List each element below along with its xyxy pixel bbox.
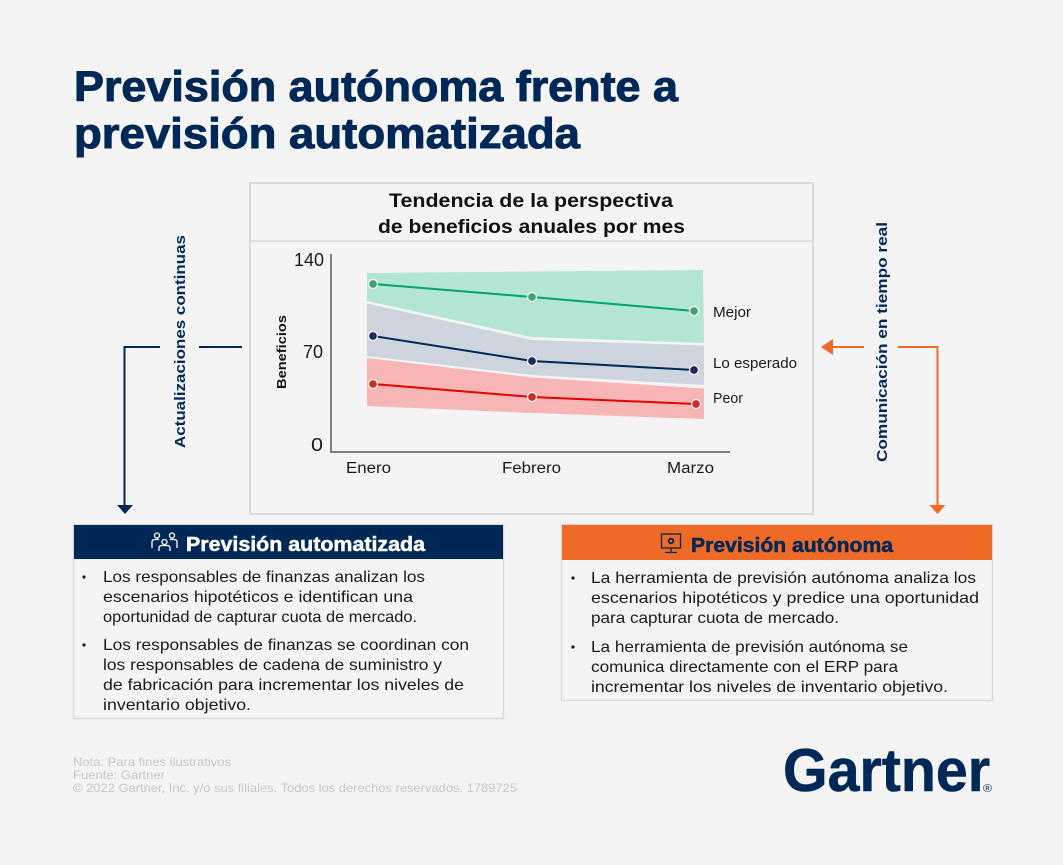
footer notes: Fuente: Gartner [73, 768, 165, 782]
icon: people [152, 533, 177, 551]
title: previsión automatizada [74, 110, 581, 158]
label: continuous updates: Actualizaciones continuas [172, 235, 189, 448]
x axis labels [346, 460, 714, 477]
panel: autonomous forecasting [562, 524, 992, 700]
label: real-time communication: Comunicación en tiempo real [874, 222, 891, 462]
bullets [571, 570, 979, 696]
y axis labels: 0 [311, 435, 323, 455]
header text: Previsión autónoma [691, 535, 894, 557]
band: mejor [367, 270, 704, 343]
footer notes [73, 755, 517, 795]
bullets: oportunidad de capturar cuota de mercado. [103, 609, 417, 626]
series labels: Lo esperado [713, 356, 797, 372]
x axis labels: Febrero [502, 460, 561, 477]
x axis labels: Enero [346, 460, 391, 477]
line: mejor [368, 280, 698, 316]
band: peor [367, 358, 704, 419]
series labels: Peor [713, 391, 743, 407]
y axis labels [294, 250, 324, 455]
arrow: real-time communication [821, 339, 946, 514]
icon: monitor with gear [662, 534, 680, 552]
bullets: los responsables de cadena de suministro y [103, 657, 442, 674]
arrow: continuous updates [117, 347, 242, 514]
chart heading [378, 191, 685, 238]
x axis labels: Marzo [667, 460, 714, 477]
y axis labels: 140 [294, 250, 324, 270]
series labels: Mejor [713, 305, 751, 321]
y axis title: Beneficios [274, 315, 289, 389]
header bar [74, 525, 503, 559]
footer notes: © 2022 Gartner, Inc. y/o sus filiales. Todos los derechos reservados. 1789725 [73, 781, 517, 795]
bullets: para capturar cuota de mercado. [591, 610, 839, 627]
title: Previsión autónoma frente a [74, 63, 679, 111]
bullets: inventario objetivo. [103, 697, 251, 714]
axes [331, 254, 730, 452]
bullets: La herramienta de previsión autónoma se [591, 639, 908, 656]
logo: Gartner: ® [983, 783, 992, 795]
bullets: incrementar los niveles de inventario objetivo. [591, 679, 948, 696]
footer notes: Nota: Para fines ilustrativos [73, 755, 231, 769]
bullets: escenarios hipotéticos e identifican una [103, 589, 413, 606]
bullets: Los responsables de finanzas se coordinan con [103, 637, 469, 654]
bullets: escenarios hipotéticos y predice una oportunidad [591, 590, 979, 607]
bullets: La herramienta de previsión autónoma analiza los [591, 570, 976, 587]
title [74, 63, 679, 158]
series labels [713, 305, 797, 407]
panel: automated forecasting [74, 524, 504, 718]
y axis labels: 70 [303, 342, 323, 362]
bullets [82, 569, 469, 714]
logo: Gartner: Gartner [783, 737, 990, 804]
line: lo esperado [368, 332, 698, 374]
band: lo esperado [367, 304, 704, 385]
chart heading: Tendencia de la perspectiva [389, 191, 673, 212]
chart heading: de beneficios anuales por mes [378, 217, 685, 238]
line: peor [368, 380, 700, 408]
header bar [562, 525, 992, 560]
header text: Previsión automatizada [186, 534, 426, 556]
panel: profit outlook chart [250, 183, 813, 514]
bullets: de fabricación para incrementar los niveles de [103, 677, 464, 694]
bullets: Los responsables de finanzas analizan los [103, 569, 425, 586]
bullets: comunica directamente con el ERP para [591, 659, 898, 676]
